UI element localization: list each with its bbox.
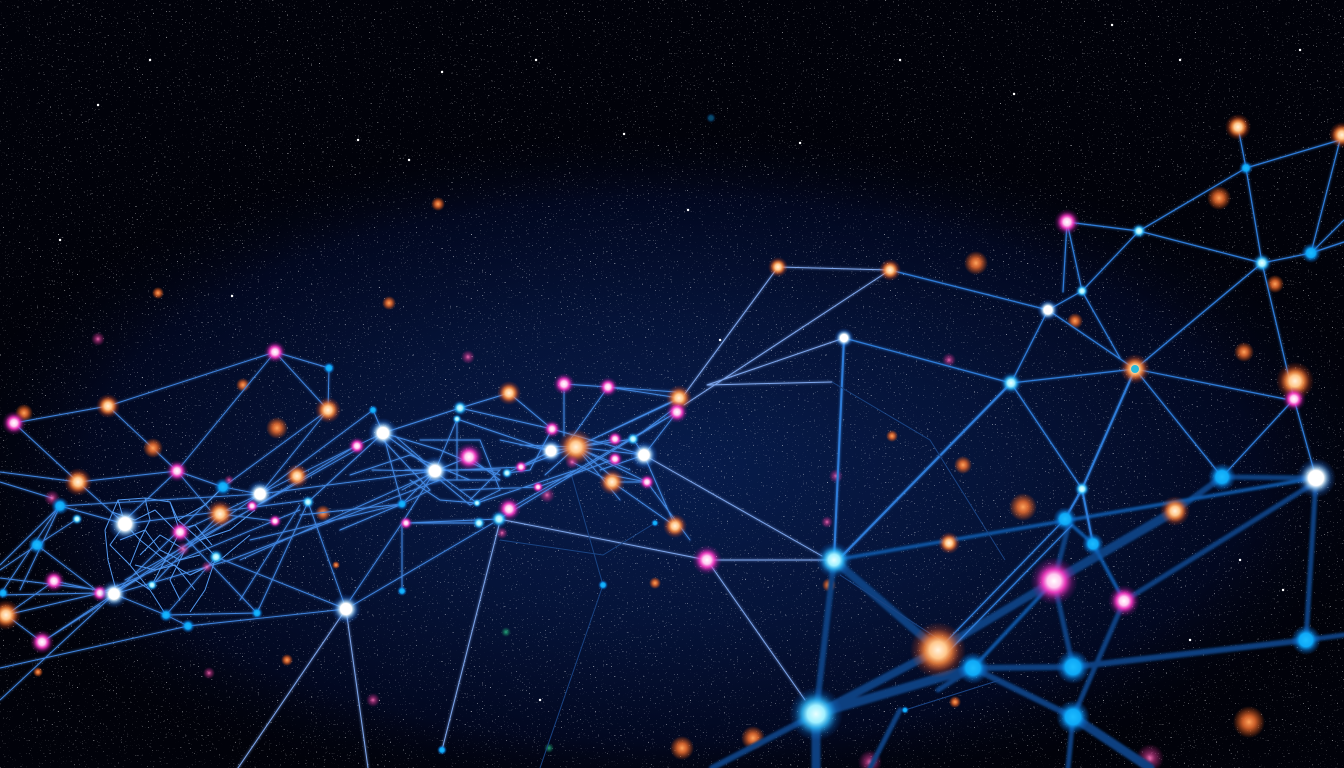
- pale edges, upper span: [238, 267, 890, 768]
- faint hairlines across the gap: [500, 382, 1005, 768]
- left cluster nodes: [0, 341, 361, 654]
- right network nodes: [768, 114, 1344, 741]
- left web mesh: [105, 490, 255, 615]
- left cluster edges: [0, 352, 493, 700]
- medium edges, right network: [834, 127, 1344, 655]
- thick foreground edges, lower right: [712, 477, 1344, 768]
- center cluster nodes: [348, 373, 722, 755]
- center cluster edges: [260, 384, 690, 540]
